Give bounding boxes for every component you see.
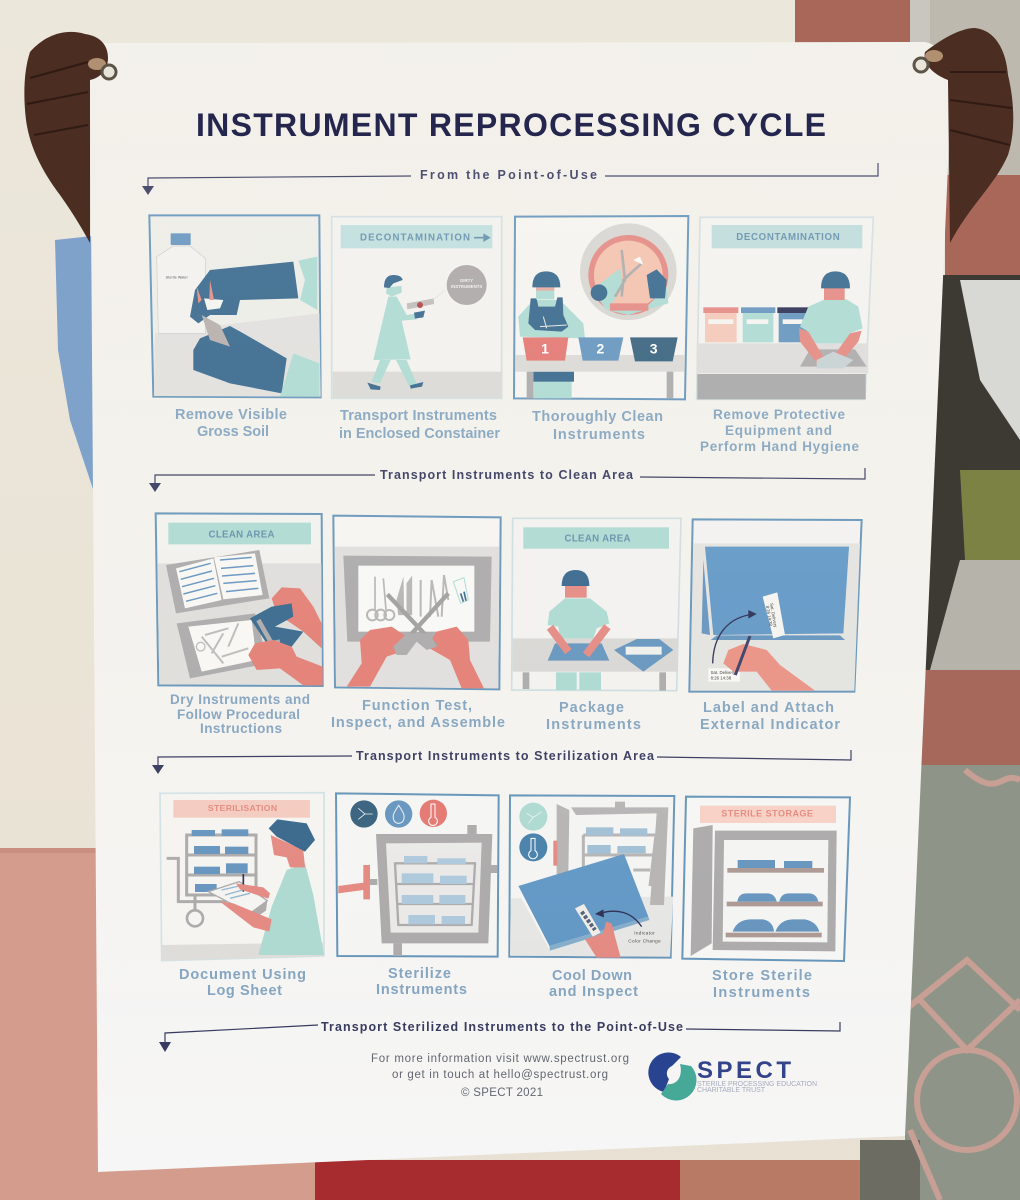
SPECT logo: CHARITABLE TRUST [697, 1087, 766, 1094]
worker washing hands [799, 271, 863, 368]
panel: label and indicator [689, 519, 862, 692]
frame [149, 215, 321, 397]
footer contact text: For more information visit www.spectrust.org [371, 1053, 629, 1065]
flow arrow: to sterilization area [152, 749, 851, 774]
poster sheet [90, 42, 952, 1172]
zone header [523, 527, 669, 549]
row 3 captions: Document Using [179, 967, 306, 983]
flow arrow: to point-of-use [159, 1020, 840, 1052]
worker at sink [518, 271, 585, 398]
left hand [347, 627, 412, 687]
basin 2: 2 [596, 340, 604, 356]
wrap tray [548, 643, 609, 661]
basin 3 [630, 337, 678, 361]
panel: remove visible gross soil [149, 215, 321, 397]
handwritten label: 8:26 14:38 [711, 675, 732, 680]
frame [512, 518, 681, 691]
panel: remove protective equipment [697, 217, 873, 399]
shirt sleeve [55, 236, 95, 495]
counter [697, 343, 868, 373]
footer contact text: or get in touch at hello@spectrust.org [392, 1069, 608, 1081]
SPECT logo [648, 1052, 817, 1101]
wrapped pack [702, 547, 849, 640]
clipboard [208, 874, 267, 917]
panel: store sterile [682, 797, 850, 961]
indicator caption [628, 931, 661, 943]
panel: thoroughly clean [514, 216, 688, 399]
row 1 captions: Perform Hand Hygiene [700, 439, 859, 454]
upper gloved hand [190, 262, 298, 323]
lower gloved hand [193, 326, 287, 393]
writing hand [723, 644, 815, 691]
zone header [168, 523, 311, 544]
storage cabinet [713, 831, 837, 951]
indicator caption: Indicator [634, 931, 655, 936]
open sterilizer [553, 802, 668, 905]
zone header [712, 225, 862, 248]
basin 1 [523, 337, 568, 361]
scissors under test [387, 593, 448, 655]
row 3 captions [179, 966, 812, 1001]
sleeves [298, 257, 317, 310]
footer contact text [371, 1053, 629, 1099]
flow arrow: from the point-of-use: From the Point-of-Use [420, 168, 597, 182]
row 1 captions: Instruments [553, 427, 645, 443]
title: INSTRUMENT REPROCESSING CYCLE [196, 107, 826, 143]
row 2 captions: Follow Procedural [177, 707, 300, 722]
frame [336, 793, 499, 957]
right hand [427, 627, 484, 688]
shelves with packs [726, 860, 824, 937]
cabinet door [691, 825, 713, 956]
flow arrow: to point-of-use: Transport Sterilized Instruments to the Point-of-Use [321, 1020, 683, 1034]
SPECT logo: SPECT [697, 1057, 791, 1084]
worker [258, 819, 324, 955]
panel: dry instruments [156, 513, 323, 686]
panel: document log sheet [160, 793, 324, 961]
zone header: STERILISATION [208, 803, 277, 813]
indicator label [763, 592, 785, 638]
sink [800, 349, 867, 367]
worker at table [548, 570, 609, 638]
row 3 captions: Instruments [713, 985, 810, 1001]
row 2 captions: Inspect, and Assemble [331, 715, 505, 731]
basin 2 [578, 337, 623, 361]
footer contact text: © SPECT 2021 [461, 1087, 543, 1099]
frame [697, 217, 873, 399]
instruments [197, 280, 230, 347]
panel: sterilize [336, 793, 499, 957]
row 2 captions [170, 692, 840, 736]
row 1 captions: Remove Protective [713, 407, 845, 422]
icon: temperature [420, 800, 447, 827]
row 2 captions: Dry Instruments and [170, 692, 310, 707]
dirty instruments callout: DIRTY [460, 278, 473, 283]
zone header: DECONTAMINATION [736, 232, 840, 243]
frame [682, 797, 850, 961]
disposal bins [703, 307, 811, 342]
frame [156, 513, 323, 686]
basin 1: 1 [541, 340, 549, 356]
zone header [341, 225, 492, 248]
basin 3: 3 [650, 340, 658, 356]
panel: function test [333, 516, 501, 689]
row 1 captions [175, 407, 859, 454]
panel: cool down and inspect [509, 795, 674, 958]
zone header [173, 800, 310, 818]
instrument cart [167, 829, 256, 926]
row 1 captions: Gross Soil [197, 424, 269, 440]
handwritten label: Sat. Delivery [711, 670, 736, 675]
flow arrow: to clean area: Transport Instruments to Clean Area [380, 468, 634, 482]
left hand [24, 32, 108, 243]
row 2 captions: Label and Attach [703, 700, 834, 716]
SPECT logo: STERILE PROCESSING EDUCATION [697, 1081, 817, 1088]
row 1 captions: Transport Instruments [340, 408, 497, 424]
dirty instruments callout [444, 263, 489, 307]
enclosed container [407, 288, 447, 309]
icon: cool time [519, 803, 547, 831]
procedure book [166, 550, 269, 613]
zone header: DECONTAMINATION [360, 233, 471, 244]
frame [332, 217, 502, 398]
scissors [258, 620, 280, 643]
frame [509, 795, 674, 958]
flow arrow: to sterilization area: Transport Instruments to Sterilization Area [356, 749, 655, 763]
grommets [102, 58, 928, 79]
row 3 captions: Store Sterile [712, 968, 812, 984]
water bottle: Sterile Water [166, 276, 188, 280]
row 2 captions: Instruments [546, 717, 641, 733]
wrapped package [614, 639, 673, 672]
hands and arms [220, 883, 272, 932]
upper hand [272, 587, 322, 648]
zone header: CLEAN AREA [565, 534, 631, 545]
water bottle [157, 233, 205, 333]
indicator label: 8:26 14:38 [765, 605, 774, 627]
panel: package instruments [512, 518, 681, 691]
row 1 captions: in Enclosed Constainer [339, 426, 500, 442]
row 3 captions: Cool Down [552, 968, 632, 984]
row 3 captions: Sterilize [388, 966, 451, 982]
frame [160, 793, 324, 961]
row 2 captions: Instructions [200, 721, 282, 736]
indicator label: Sat. Delivery [769, 603, 778, 628]
indicator strip [453, 578, 468, 603]
zone header: CLEAN AREA [209, 529, 275, 540]
row 1 captions: Remove Visible [175, 407, 287, 423]
zone header: STERILE STORAGE [721, 809, 813, 819]
cooled wrapped pack [516, 854, 649, 951]
icon: time [350, 800, 378, 828]
placement arrow [713, 610, 757, 663]
zone header [700, 806, 836, 823]
table [515, 355, 685, 398]
handwritten label [708, 668, 740, 682]
sterilizer chamber [376, 825, 497, 956]
door handle [338, 865, 377, 899]
row 3 captions: Log Sheet [207, 983, 282, 999]
indicator caption: Color Change [628, 938, 661, 943]
pen [735, 636, 750, 675]
row 1 captions: Thoroughly Clean [532, 409, 663, 425]
row 2 captions: External Indicator [700, 717, 840, 733]
row 2 captions: Package [559, 700, 624, 716]
flow arrow: from the point-of-use [142, 163, 878, 195]
table [513, 638, 678, 691]
dirty instruments callout: INSTRUMENTS [451, 284, 482, 289]
worker arms [550, 627, 607, 655]
row 3 captions: Instruments [376, 982, 467, 998]
panel: transport instruments [332, 217, 502, 398]
cabinet [697, 374, 866, 399]
instrument tray [177, 613, 268, 678]
instruments on tray [367, 575, 448, 620]
flow arrow: to clean area [149, 468, 865, 492]
row 2 captions: Function Test, [362, 698, 472, 714]
walking worker [367, 275, 425, 390]
frame [333, 516, 501, 689]
colour change arrow [595, 909, 642, 927]
frame [514, 216, 688, 399]
icon: cool temperature [519, 833, 547, 861]
row 3 captions: and Inspect [549, 984, 638, 1000]
drying cloth [250, 603, 303, 647]
magnified view [580, 223, 677, 320]
row 1 captions: Equipment and [725, 423, 832, 438]
tray [343, 556, 492, 642]
right hand [925, 28, 1013, 243]
icon: humidity [385, 800, 412, 828]
hand [585, 922, 621, 958]
frame [689, 519, 862, 692]
lower hand [248, 640, 323, 685]
indicator on pack [575, 904, 601, 937]
